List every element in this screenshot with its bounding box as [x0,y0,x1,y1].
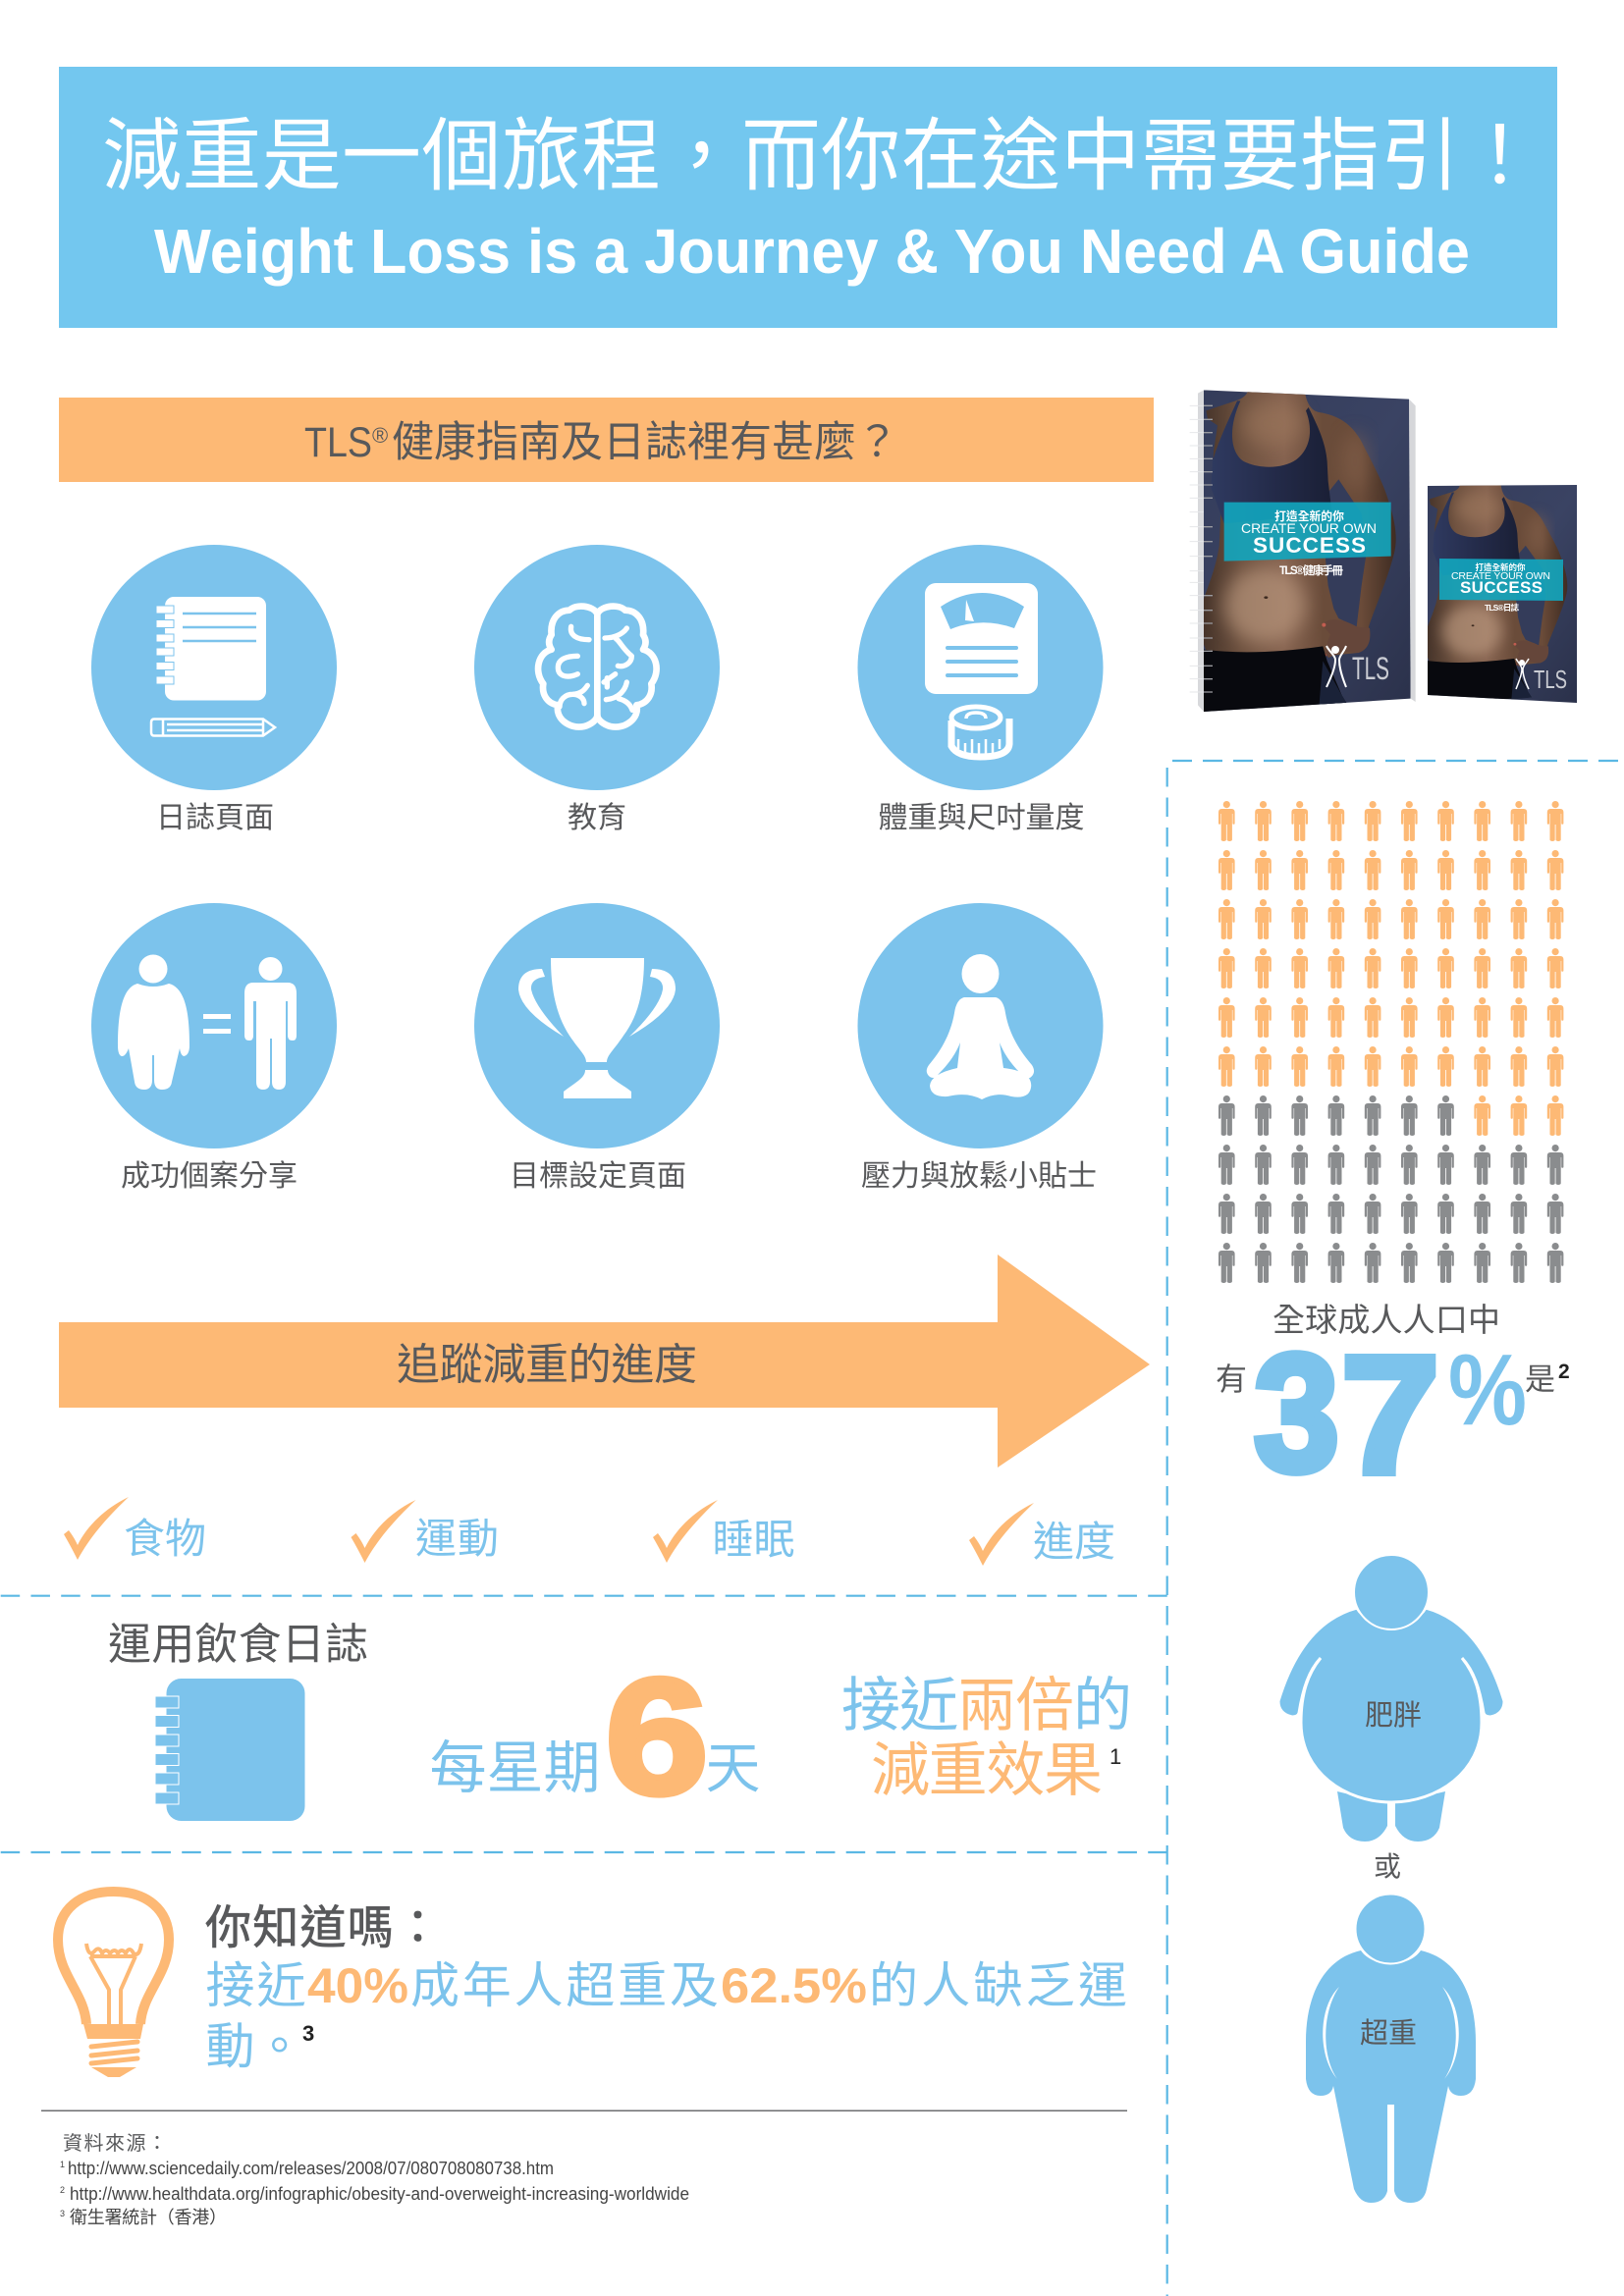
panel: weight and size measures [858,545,1104,834]
source 1: http://www.sciencedaily.com/releases/2008/07/080708080738.htm [68,2159,554,2178]
panel: goal setting pages [474,903,720,1193]
big number: 7 [1341,1322,1439,1509]
statistic: 37 percent of global adults: % [1448,1333,1527,1446]
sources [41,2110,1127,2227]
big number: 3 [1254,1320,1339,1507]
food journal section [108,1621,1132,1829]
did you know section [58,1892,1127,2077]
icon: notebook [151,597,275,736]
connector word: or: 或 [1374,1851,1401,1882]
heading: 你知道嗎： [205,1901,441,1953]
statement: six days a week [430,1644,760,1829]
book: journal: CREATE YOUR OWN [1451,570,1550,582]
book: journal [1424,483,1583,706]
book: guide: TLS [1352,651,1389,686]
label: 目標設定頁面 [510,1160,686,1193]
statement: six days a week: 天 [705,1737,760,1799]
label: 日誌頁面 [156,802,274,834]
label: 肥胖 [1365,1699,1422,1732]
book: guide: 打造全新的你 [1274,509,1344,523]
statistic: 37 percent of global adults [1216,1302,1570,1509]
sources heading: 資料來源： [63,2132,167,2155]
icon: light bulb [58,1892,169,2077]
heading bar: what is in the TLS guide and journal: 健康指南及日誌裡有甚麼？ [392,419,898,466]
pictogram chart: share of adults [1218,801,1563,1283]
statement: six days a week: 6 [605,1644,709,1829]
check: sleep [653,1500,795,1563]
statistic text: 62.5% [721,1958,867,2013]
TLS guide and journal books [1190,386,1583,717]
label: 成功個案分享 [121,1160,298,1193]
check: sleep: 睡眠 [713,1517,795,1563]
statement: nearly double weight loss [841,1673,1132,1803]
panel: education [474,545,720,834]
check: exercise [352,1500,499,1563]
arrow: track weight loss progress: 追蹤減重的進度 [397,1341,697,1389]
panel: stress and relaxation tips [858,903,1104,1193]
statistic text: 成年人超重及 [410,1958,719,2013]
book: journal: TLS®日誌 [1485,603,1519,613]
icon: meditating figure [927,954,1034,1099]
check: food [64,1497,206,1562]
statistic text: 動。 [206,2019,304,2074]
check: food: 食物 [124,1516,206,1562]
source 3: 3 [60,2209,65,2218]
big number [1254,1320,1439,1509]
statistic text: 40% [307,1958,408,2013]
caption: 全球成人人口中 [1272,1302,1500,1338]
label: 超重 [1360,2017,1417,2050]
heading bar: what is in the TLS guide and journal [59,398,1154,482]
panel: success stories [91,903,337,1193]
label: 體重與尺吋量度 [878,802,1084,834]
arrow: track weight loss progress [59,1255,1150,1468]
label: 教育 [568,802,626,834]
icon: trophy [518,958,676,1098]
statistic text: 的人缺乏運 [869,1958,1127,2013]
heading: 運用飲食日誌 [108,1621,368,1669]
statement: nearly double weight loss: 1 [1110,1744,1121,1769]
statement: nearly double weight loss: 接近兩倍的 [841,1673,1132,1738]
source 2: http://www.healthdata.org/infographic/obesity-and-overweight-increasing-worldwide [70,2184,689,2204]
statement: six days a week: 每星期 [430,1736,601,1800]
statistic: 37 percent of global adults: 是 [1525,1362,1555,1397]
icon: brain [538,607,657,727]
icon: solid notebook [155,1679,304,1821]
book: guide [1190,386,1417,717]
book: guide: TLS®健康手冊 [1279,563,1343,577]
statistic: 37 percent of global adults: 有 [1216,1362,1247,1397]
header banner [59,67,1557,328]
title: Chinese: 減重是一個旅程，而你在途中需要指引！ [102,113,1540,201]
check: progress: 進度 [1033,1519,1115,1565]
statistic text: 接近 [206,1958,306,2013]
tracking checklist [64,1497,1115,1566]
book: guide: SUCCESS [1253,533,1366,558]
dashed section dividers [0,761,1624,2296]
statement: nearly double weight loss: 減重效果 [871,1737,1103,1803]
check: exercise: 運動 [415,1516,499,1562]
icon: tape measure [951,707,1009,757]
statistic text: 3 [302,2021,314,2046]
statistic: 37 percent of global adults: 2 [1558,1361,1570,1383]
icon: heavy person equals slim person [118,954,297,1090]
title: English: Weight Loss is a Journey & You Need A Guide [154,216,1470,287]
source 3: 衛生署統計（香港） [70,2208,227,2227]
book: journal: 打造全新的你 [1475,562,1526,572]
source 1: 1 [60,2160,65,2169]
heading bar: what is in the TLS guide and journal: ® [372,423,388,448]
figure: obese [1278,1555,1504,1842]
label: 壓力與放鬆小貼士 [861,1160,1097,1193]
panel: journal pages [91,545,337,834]
book: journal: SUCCESS [1460,578,1543,597]
statistic text [206,1958,1127,2074]
check: progress [969,1503,1115,1566]
figure: overweight [1306,1895,1476,2203]
book: guide: CREATE YOUR OWN [1241,520,1377,536]
book: journal: TLS [1534,665,1567,694]
heading bar: what is in the TLS guide and journal: TLS [304,419,372,466]
source 2: 2 [60,2185,65,2195]
icon: scale [925,583,1038,694]
